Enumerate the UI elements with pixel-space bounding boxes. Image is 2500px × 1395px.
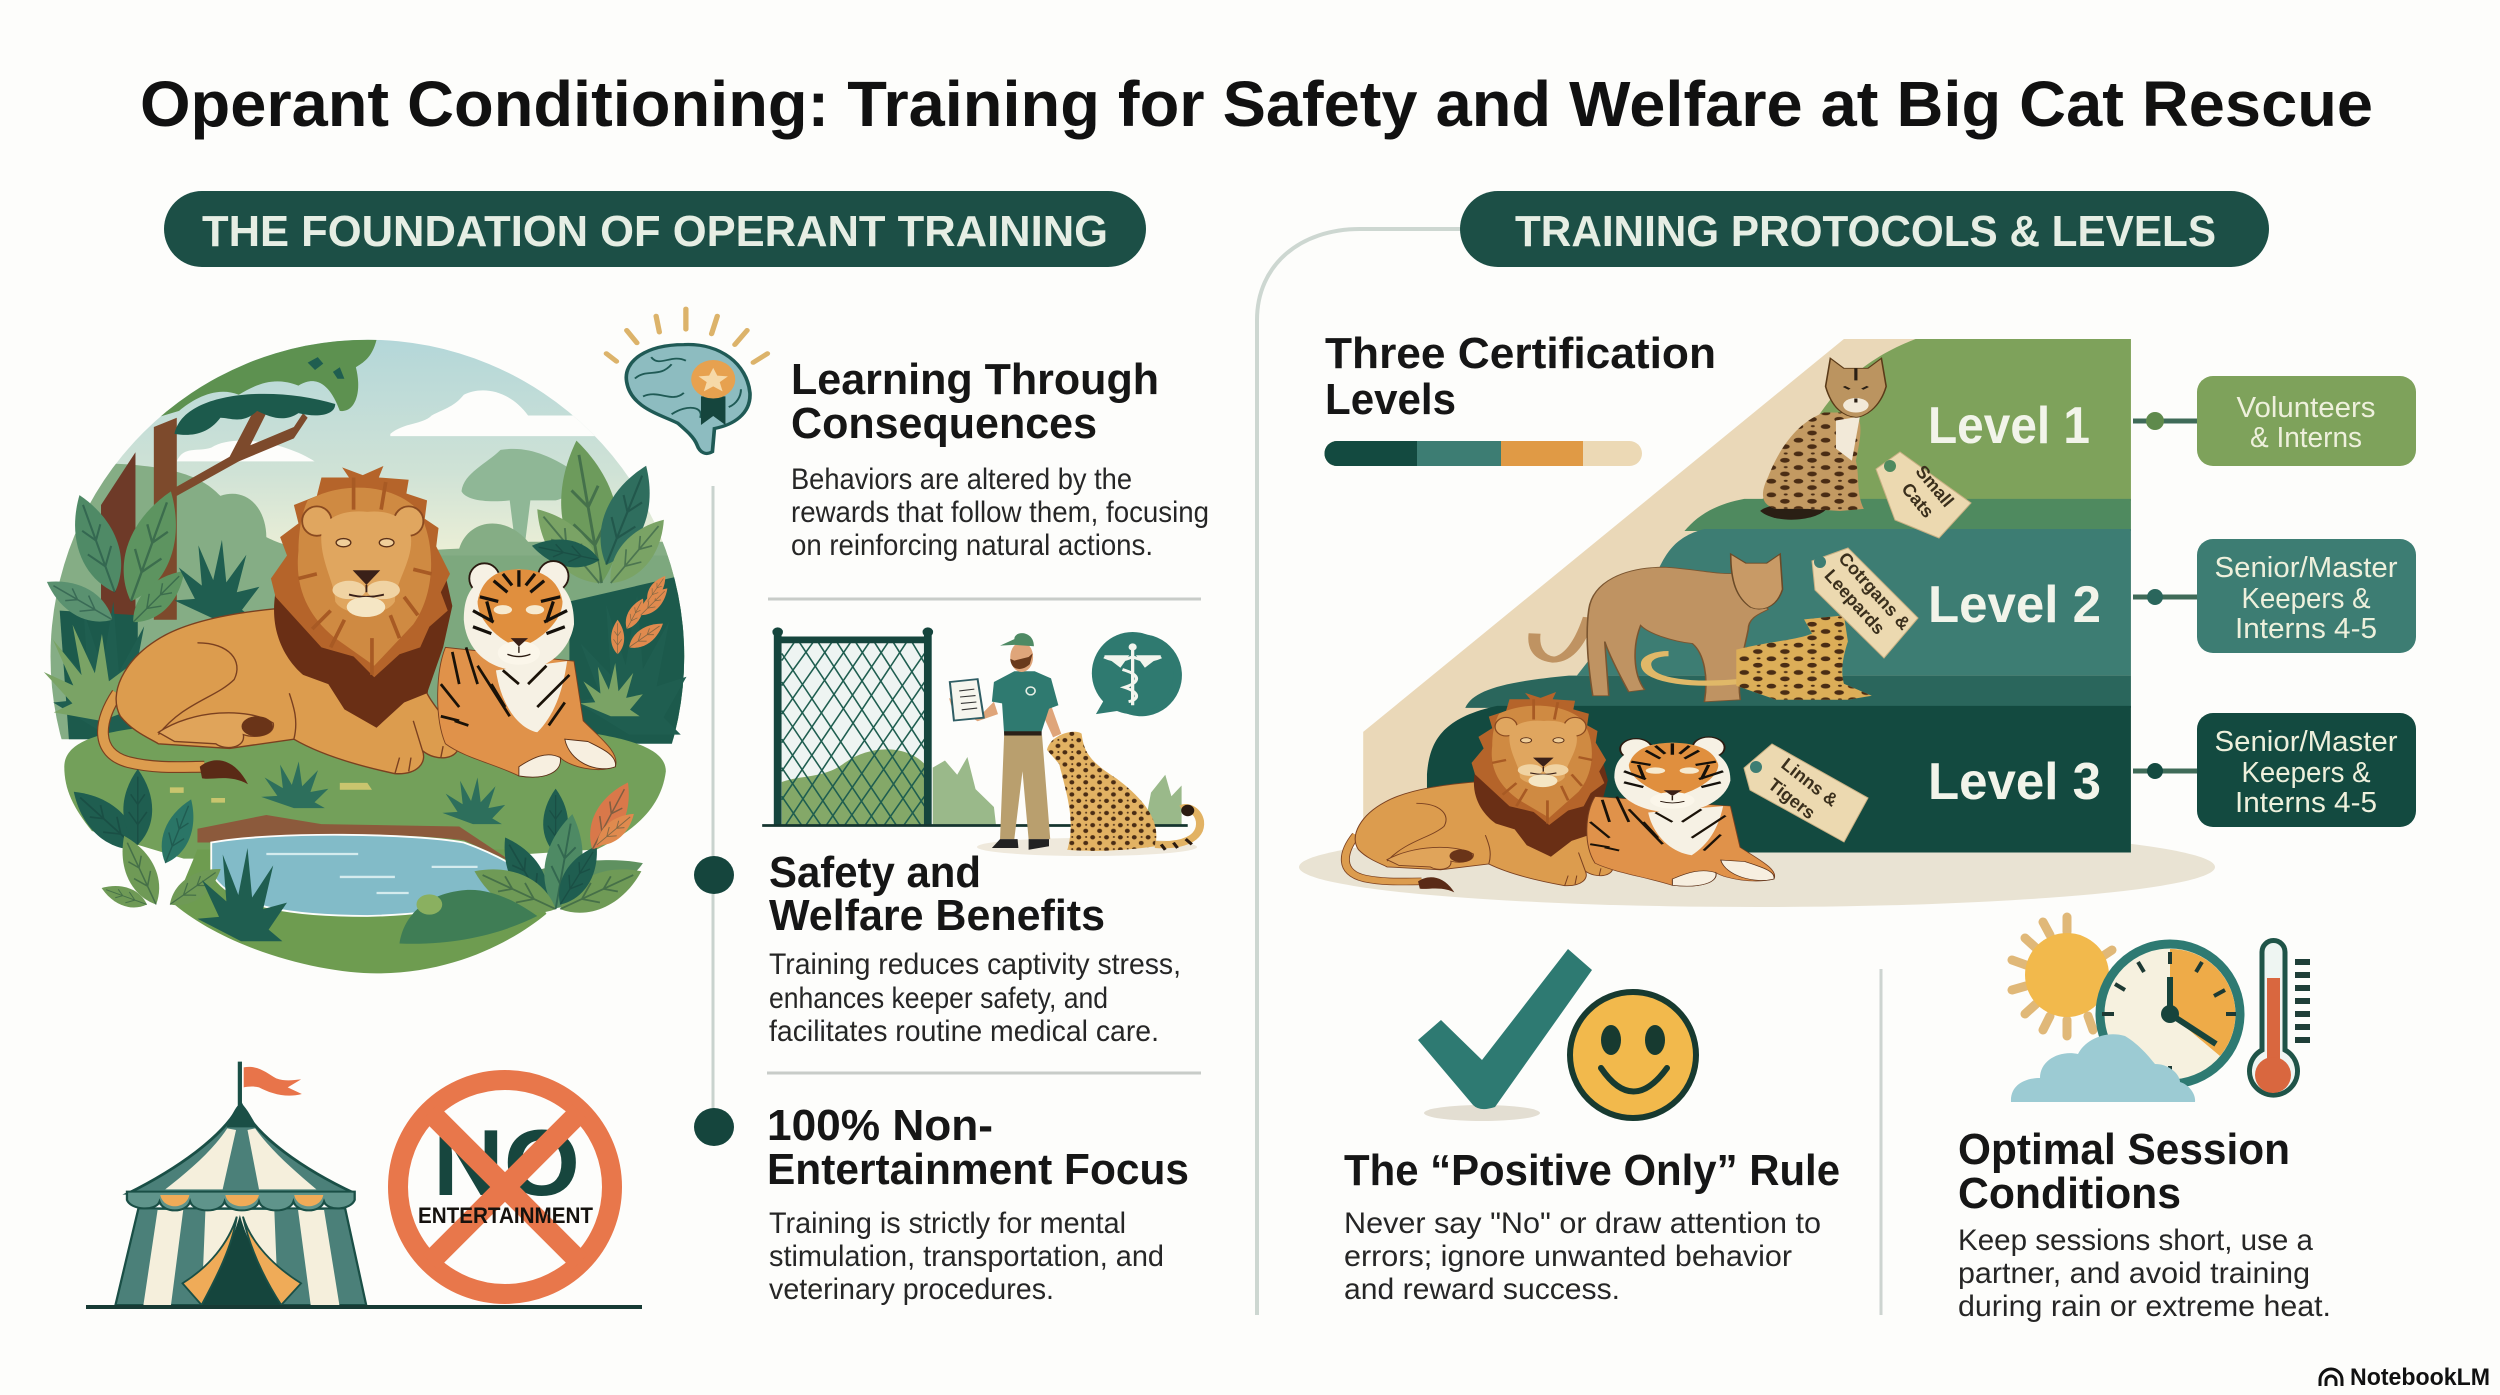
block: learning through consequences [791,355,1209,562]
icon: sun, clock, cloud, thermometer [2011,917,2310,1102]
block: non-entertainment focus: veterinary procedures. [769,1273,1054,1306]
block: optimal session conditions: Optimal Session [1958,1125,2290,1174]
box: level 2 keepers: Keepers & [2242,583,2370,615]
header pill: protocols: TRAINING PROTOCOLS & LEVELS [1515,207,2216,256]
block: safety and welfare benefits: Safety and [769,848,981,897]
heading: three certification levels: Three Certification [1325,329,1716,378]
block: non-entertainment focus: Entertainment Focus [767,1145,1189,1194]
header pill: foundation [164,191,1146,267]
tag: cougars and leopards: Leepards [1821,566,1889,638]
box: level 3 keepers: Interns 4-5 [2235,787,2377,819]
block: learning through consequences: on reinforcing natural actions. [791,529,1153,562]
header pill: protocols [1460,191,2269,267]
tag: lions and tigers: Linns & [1778,754,1842,810]
icon: circus tent [115,1062,366,1305]
block: learning through consequences: Behaviors are altered by the [791,463,1132,496]
block: learning through consequences: rewards that follow them, focusing [791,496,1209,529]
box: level 3 keepers: Senior/Master [2214,726,2398,758]
box: level 3 keepers: Keepers & [2242,757,2370,789]
tag: cougars and leopards [1812,548,1918,658]
tag: lions and tigers: Tigers [1764,774,1819,823]
box: volunteers and interns: Volunteers [2236,392,2376,424]
box: level 2 keepers: Interns 4-5 [2235,613,2377,645]
block: positive only rule [1344,1146,1840,1306]
tag: small cats: Small [1911,461,1958,511]
icon: lion on level 3 [1345,692,1613,892]
box: volunteers and interns [2197,376,2416,466]
icon: check mark and smiley [1418,949,1696,1121]
block: optimal session conditions: Conditions [1958,1169,2181,1218]
block: non-entertainment focus [767,1101,1189,1306]
block: safety and welfare benefits: Welfare Benefits [769,891,1105,940]
icon: tiger on level 3 [1587,737,1775,886]
block: positive only rule: errors; ignore unwanted behavior [1344,1240,1792,1273]
icon: ocelot on level 1 [1760,358,1886,520]
legend colour bar [1324,441,1642,466]
connector line: right panel frame [1257,229,1465,1315]
block: safety and welfare benefits: enhances keeper safety, and [769,982,1108,1015]
level labels [1928,397,2101,811]
block: optimal session conditions [1958,1125,2331,1323]
block: non-entertainment focus: Training is strictly for mental [769,1207,1126,1240]
block: learning through consequences: Learning Through [791,355,1159,404]
chart: certification pyramid [1299,339,2215,907]
level labels: Level 3 [1928,753,2101,811]
box: level 2 keepers [2197,539,2416,653]
block: learning through consequences: Consequences [791,399,1097,448]
block: positive only rule: and reward success. [1344,1273,1620,1306]
icon: cougar and leopard on level 2 [1534,554,1872,702]
block: optimal session conditions: partner, and avoid training [1958,1257,2310,1290]
icon: no entertainment sign: NO [433,1110,580,1215]
watermark: NotebookLM: NotebookLM [2350,1364,2490,1391]
icon: no entertainment sign [398,1080,612,1294]
tag: small cats: Cats [1898,479,1938,522]
header pill: foundation: THE FOUNDATION OF OPERANT TRAINING [202,207,1108,256]
illustration: fence, keeper and cheetah [762,627,1200,851]
block: positive only rule: Never say "No" or draw attention to [1344,1207,1821,1240]
tag: small cats [1876,452,1971,538]
connectors [2133,412,2198,779]
tag: cougars and leopards: Cotrgans & [1835,548,1914,634]
level labels: Level 1 [1928,397,2090,455]
box: level 2 keepers: Senior/Master [2214,552,2398,584]
block: safety and welfare benefits [769,848,1181,1048]
block: safety and welfare benefits: Training reduces captivity stress, [769,948,1181,981]
box: level 3 keepers [2197,713,2416,827]
illustration: lion and tiger in jungle scene [28,340,689,973]
block: non-entertainment focus: 100% Non- [767,1101,993,1150]
icon: no entertainment sign: ENTERTAINMENT [418,1203,594,1228]
block: safety and welfare benefits: facilitates routine medical care. [769,1015,1159,1048]
title: Operant Conditioning: Training for Safety and Welfare at Big Cat Rescue [140,68,2373,140]
heading: three certification levels [1325,329,1716,424]
block: optimal session conditions: Keep sessions short, use a [1958,1224,2313,1257]
block: non-entertainment focus: stimulation, transportation, and [769,1240,1164,1273]
timeline rail [694,486,734,1146]
heading: three certification levels: Levels [1325,375,1456,424]
block: optimal session conditions: during rain or extreme heat. [1958,1290,2331,1323]
icon: brain with medal [606,309,767,453]
block: positive only rule: The “Positive Only” Rule [1344,1146,1840,1195]
tag: lions and tigers [1744,744,1868,842]
level labels: Level 2 [1928,576,2101,634]
box: volunteers and interns: & Interns [2250,422,2362,454]
